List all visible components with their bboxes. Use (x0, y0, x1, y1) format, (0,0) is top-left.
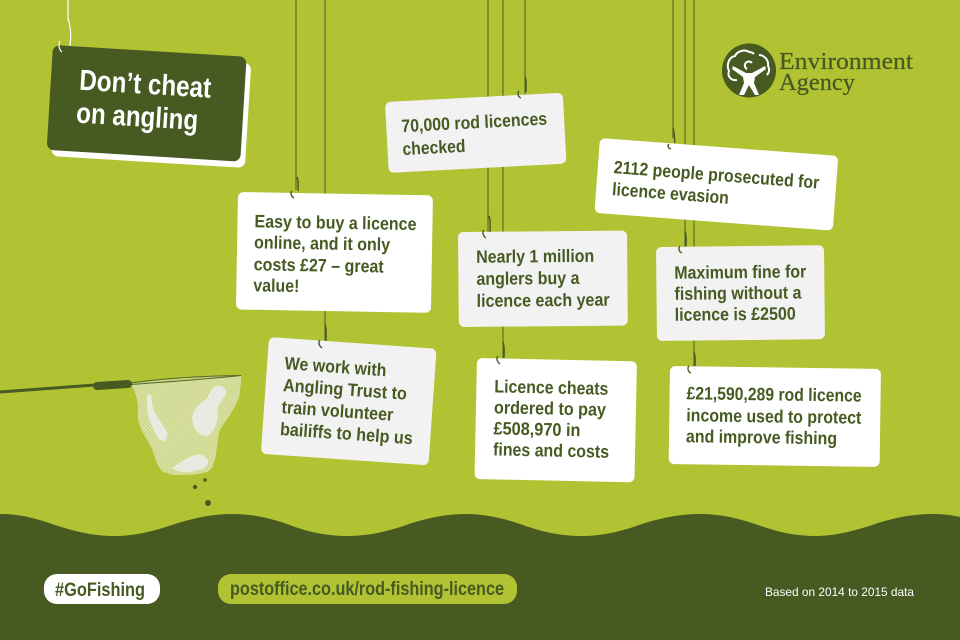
panel: licence cheats (474, 358, 637, 482)
panel: easy to buy: Easy to buy a licence (254, 211, 417, 234)
panel: prosecuted: licence evasion (611, 179, 730, 208)
panel: angling trust (261, 337, 437, 465)
icon: tree and figure (722, 44, 776, 98)
panel: licence cheats: fines and costs (493, 439, 609, 462)
panel: title sign (46, 45, 252, 168)
sign shadow (51, 51, 251, 168)
panel: anglers (458, 231, 628, 327)
panel: rod licence income: and improve fishing (686, 426, 837, 448)
source note: Based on 2014 to 2015 data (765, 585, 914, 599)
hooks (291, 76, 695, 373)
net highlights (147, 386, 226, 472)
panel: anglers: Nearly 1 million (476, 246, 594, 267)
panel: rod licences checked (385, 93, 566, 173)
panel: easy to buy: value! (253, 275, 300, 296)
panel: easy to buy: online, and it only (254, 232, 390, 255)
panel: maximum fine: Maximum fine for (674, 261, 806, 283)
wordmark: Agency (779, 69, 856, 96)
panel: maximum fine: licence is £2500 (675, 304, 796, 325)
icon: landing net (0, 376, 241, 506)
panel: licence cheats: £508,970 in (493, 418, 581, 440)
sign face (47, 45, 247, 162)
hashtag button: #GoFishing (55, 580, 145, 601)
hook: title (59, 0, 71, 52)
url button: postoffice.co.uk/rod-fishing-licence (230, 579, 504, 600)
net bag (131, 376, 241, 475)
panel: rod licences checked: 70,000 rod licences (401, 109, 548, 136)
net grip (97, 384, 128, 386)
net handle (0, 385, 95, 392)
panel: rod licence income: income used to protect (686, 405, 861, 428)
panel: angling trust: Angling Trust to (282, 375, 408, 404)
url button (218, 574, 517, 604)
hashtag button (44, 574, 160, 604)
panel: rod licence income (669, 366, 881, 467)
panel: prosecuted: 2112 people prosecuted for (613, 157, 820, 193)
panel: maximum fine (656, 245, 825, 341)
droplets (193, 478, 211, 506)
panel: easy to buy (236, 192, 433, 313)
net rim (131, 376, 241, 384)
fishing lines (296, 0, 694, 368)
heading: on angling (75, 98, 199, 137)
panel: rod licence income: £21,590,289 rod licence (686, 383, 862, 406)
panel: easy to buy: costs £27 – great (254, 254, 384, 277)
panel: anglers: licence each year (477, 290, 610, 311)
heading: Don’t cheat (78, 65, 212, 105)
wordmark: Environment (779, 48, 913, 75)
panel: angling trust: We work with (284, 353, 387, 380)
panel: licence cheats: ordered to pay (494, 397, 606, 420)
panel: licence cheats: Licence cheats (494, 376, 609, 399)
panel: maximum fine: fishing without a (674, 282, 802, 304)
panel: angling trust: bailiffs to help us (279, 419, 413, 448)
panel: rod licences checked: checked (402, 136, 466, 159)
panel: anglers: anglers buy a (476, 268, 580, 289)
footer band (0, 514, 960, 640)
panel: angling trust: train volunteer (281, 397, 394, 425)
logo: Environment Agency (722, 44, 913, 98)
panel: prosecuted (594, 138, 838, 231)
